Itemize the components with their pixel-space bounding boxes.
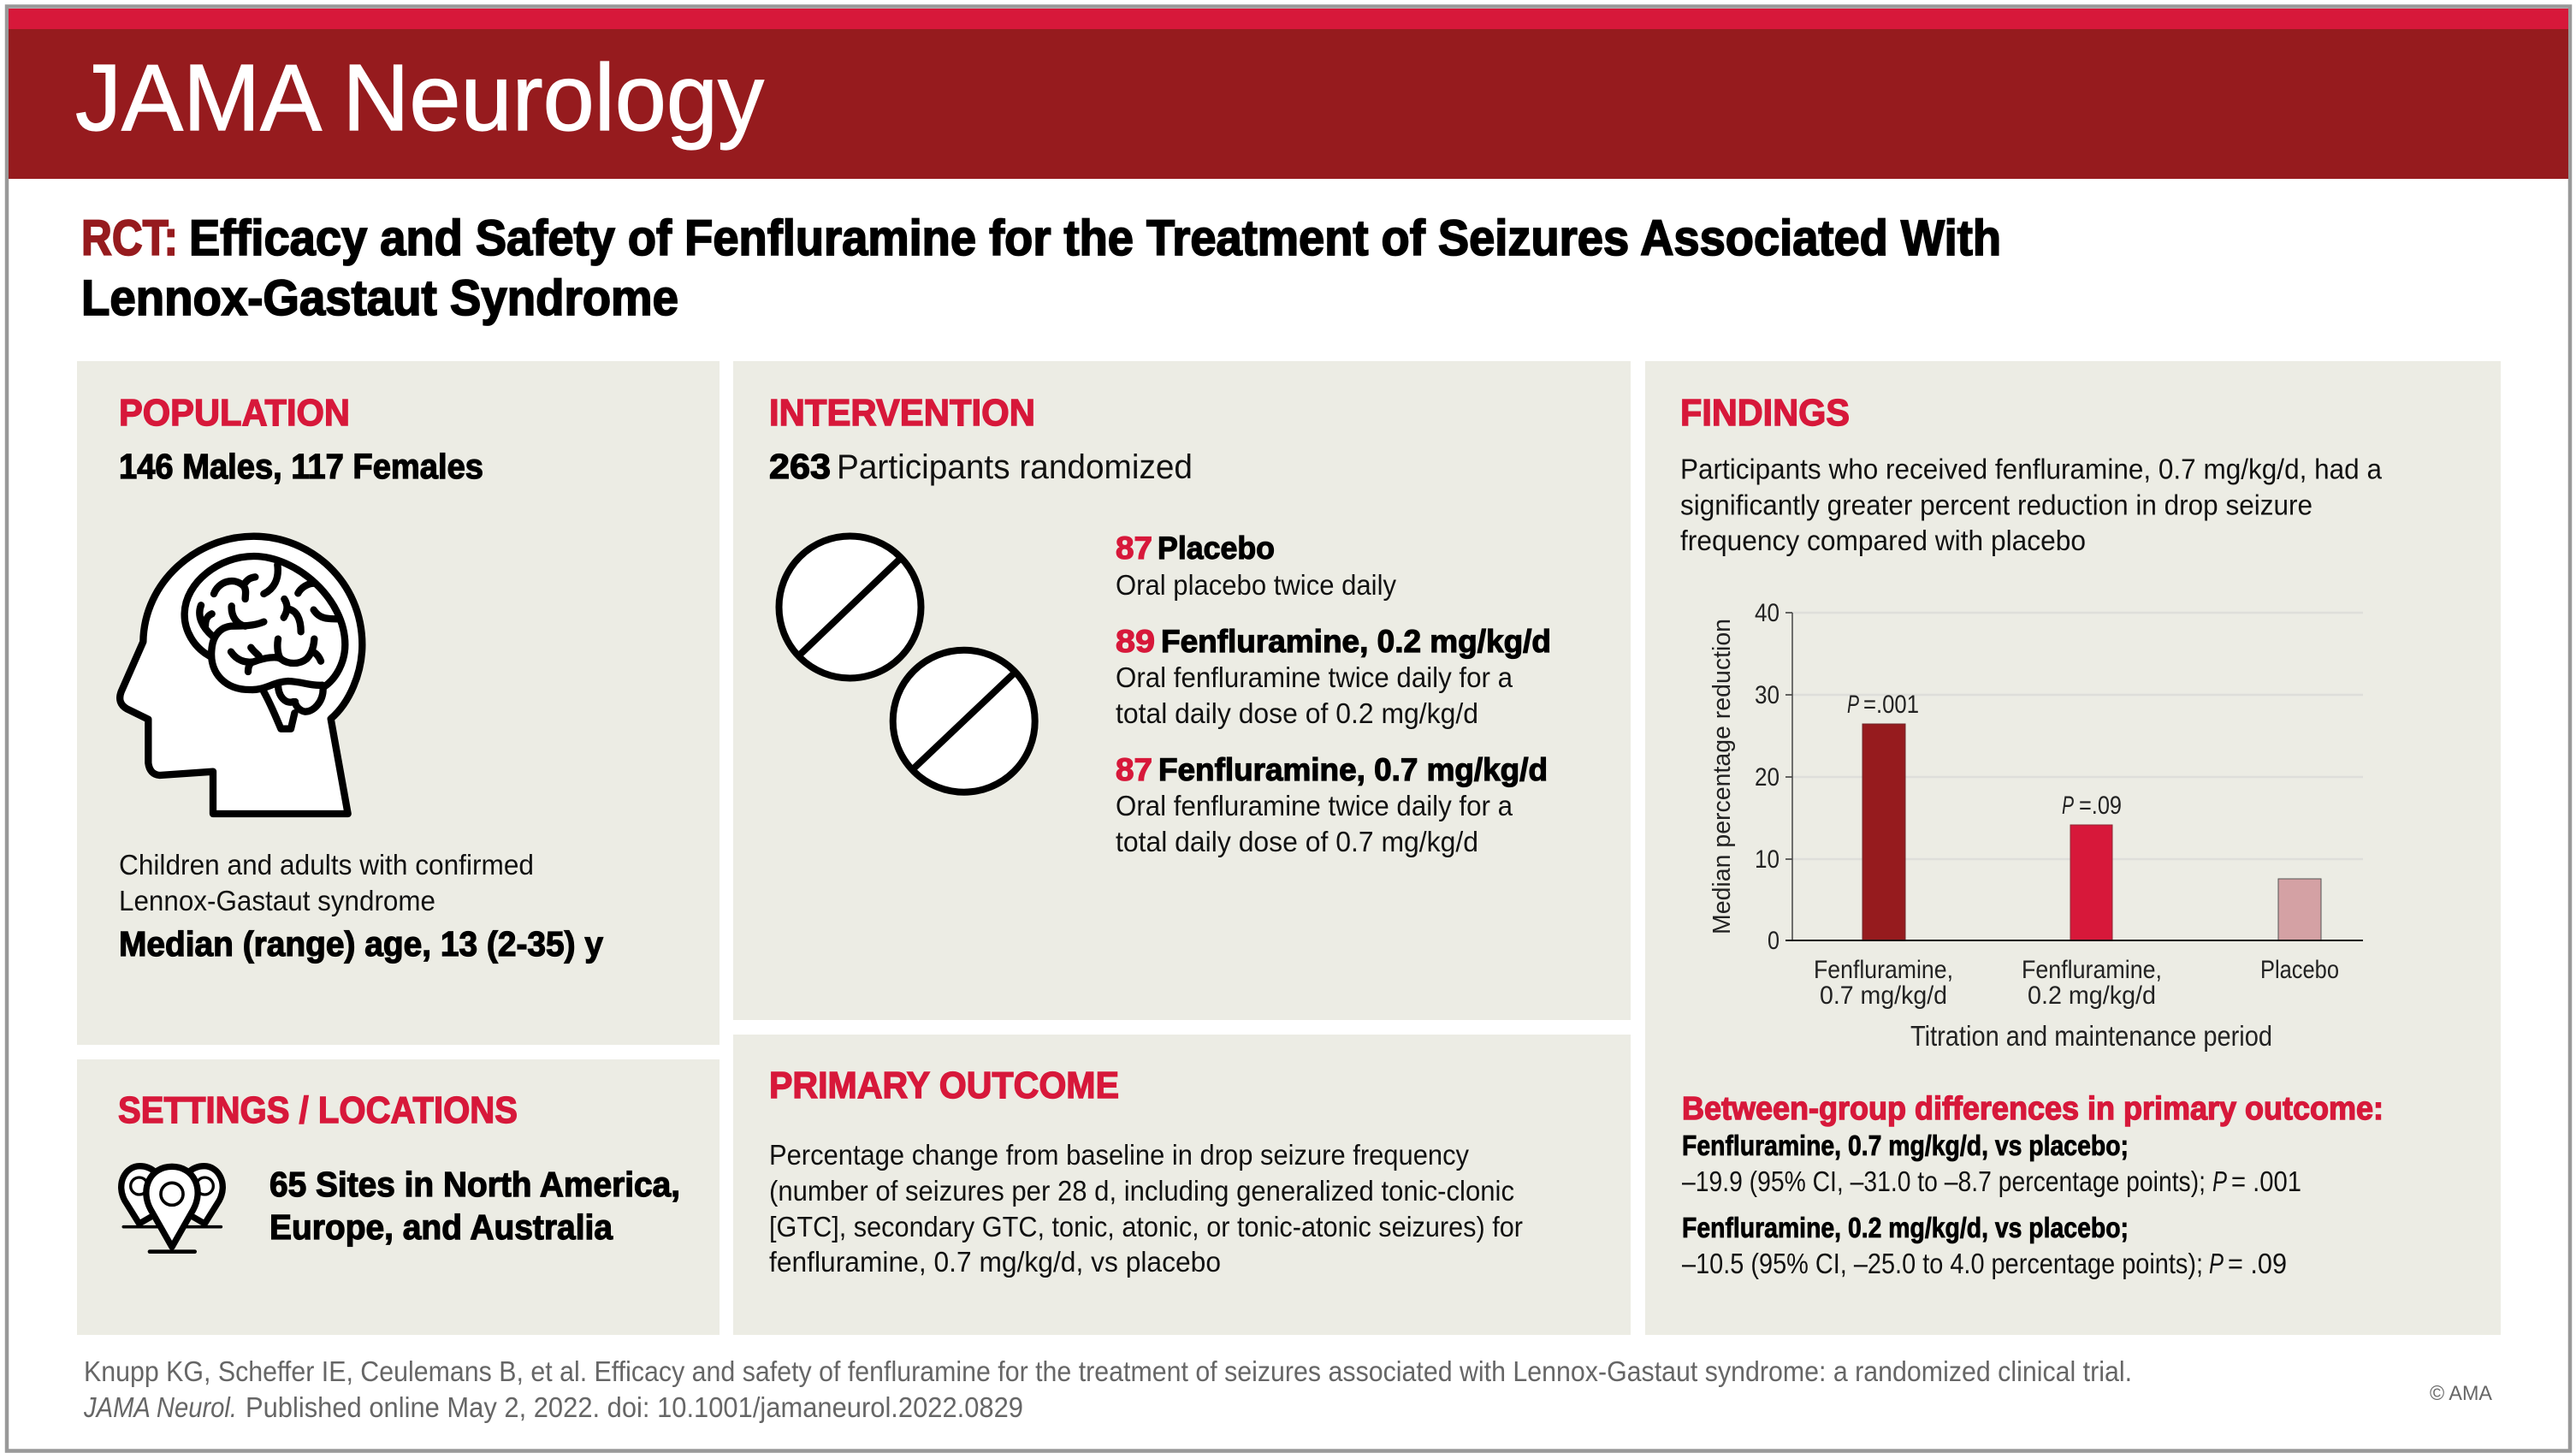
x-axis label: placebo: Placebo	[2260, 956, 2339, 984]
x-axis label: fenfluramine 0.7	[1814, 956, 1953, 1010]
x-axis label: fenfluramine 0.7: 0.7 mg/kg/d	[1820, 982, 1947, 1010]
heading: primary outcome: PRIMARY OUTCOME	[769, 1065, 1119, 1106]
primary outcome description: [GTC], secondary GTC, tonic, atonic, or tonic-atonic seizures) for	[769, 1212, 1523, 1243]
panel: findings	[1645, 361, 2501, 1335]
arm: placebo: 87	[1116, 531, 1152, 566]
x-axis label: fenfluramine 0.2: Fenfluramine,	[2022, 956, 2162, 984]
x-axis label: fenfluramine 0.2	[2022, 956, 2162, 1010]
result: fenfluramine 0.7 vs placebo: P	[2212, 1166, 2227, 1198]
y-axis tick labels: 0	[1768, 927, 1780, 955]
result: fenfluramine 0.7 vs placebo: –19.9 (95% CI, –31.0 to –8.7 percentage points);	[1682, 1166, 2206, 1198]
panel: settings and locations	[77, 1059, 720, 1335]
panel: primary outcome	[733, 1035, 1631, 1335]
p value: 0.7: P	[1847, 691, 1859, 719]
arm: fenfluramine 0.2	[1116, 624, 1551, 730]
participants randomized: 263	[769, 447, 831, 486]
result: fenfluramine 0.7 vs placebo: Fenfluramine, 0.7 mg/kg/d, vs placebo;	[1682, 1130, 2129, 1161]
article title	[81, 211, 2001, 326]
heading: findings: FINDINGS	[1680, 392, 1850, 434]
arm: fenfluramine 0.2: total daily dose of 0.2 mg/kg/d	[1116, 698, 1478, 730]
sites text: 65 Sites in North America,	[269, 1165, 680, 1204]
result: fenfluramine 0.2 vs placebo: P	[2209, 1248, 2224, 1280]
primary outcome description: fenfluramine, 0.7 mg/kg/d, vs placebo	[769, 1247, 1221, 1278]
population description: Lennox-Gastaut syndrome	[119, 886, 435, 917]
result: fenfluramine 0.7 vs placebo	[1682, 1130, 2301, 1198]
arm: placebo: Placebo	[1158, 531, 1275, 566]
p value: 0.7	[1847, 691, 1919, 719]
p value: 0.7: =.001	[1863, 691, 1919, 719]
arm: fenfluramine 0.7: Fenfluramine, 0.7 mg/kg/d	[1158, 752, 1548, 787]
primary outcome description	[769, 1140, 1523, 1278]
bar: placebo	[2278, 879, 2321, 940]
findings summary: Participants who received fenfluramine, 0.7 mg/kg/d, had a	[1680, 454, 2382, 486]
heading: population: POPULATION	[119, 392, 350, 434]
sites text: Europe, and Australia	[269, 1207, 613, 1247]
panel: intervention	[733, 361, 1631, 1020]
p value: 0.2	[2062, 792, 2122, 820]
primary outcome description: Percentage change from baseline in drop seizure frequency	[769, 1140, 1469, 1171]
y-axis tick labels: 10	[1755, 845, 1780, 874]
arm: fenfluramine 0.2: 89	[1116, 624, 1155, 659]
y-axis tick labels	[1755, 599, 1780, 955]
article title: RCT:	[81, 211, 178, 266]
arm: fenfluramine 0.7	[1116, 752, 1548, 858]
citation	[83, 1356, 2132, 1424]
result: fenfluramine 0.2 vs placebo	[1682, 1212, 2287, 1280]
population counts: 146 Males, 117 Females	[119, 447, 483, 486]
article title: Lennox-Gastaut Syndrome	[81, 270, 678, 326]
x-axis title: Titration and maintenance period	[1910, 1020, 2272, 1052]
arm: placebo	[1116, 531, 1396, 602]
journal title: JAMA Neurology	[75, 45, 764, 151]
population description: Children and adults with confirmed	[119, 850, 534, 881]
icon: pills	[779, 536, 1035, 792]
result: fenfluramine 0.7 vs placebo: = .001	[2231, 1166, 2301, 1198]
median age: Median (range) age, 13 (2-35) y	[119, 924, 603, 964]
heading: intervention: INTERVENTION	[769, 392, 1035, 434]
header band	[9, 9, 2568, 179]
copyright: © AMA	[2430, 1382, 2492, 1405]
heading: settings: SETTINGS / LOCATIONS	[118, 1089, 518, 1131]
panel: population	[77, 361, 720, 1045]
arm: fenfluramine 0.2: Oral fenfluramine twice daily for a	[1116, 662, 1513, 694]
citation: JAMA Neurol.	[83, 1392, 237, 1424]
sites text	[269, 1165, 680, 1247]
arm: fenfluramine 0.7: total daily dose of 0.7 mg/kg/d	[1116, 827, 1478, 858]
result: fenfluramine 0.2 vs placebo: Fenfluramine, 0.2 mg/kg/d, vs placebo;	[1682, 1212, 2129, 1243]
result: fenfluramine 0.2 vs placebo: = .09	[2228, 1248, 2287, 1280]
citation: Knupp KG, Scheffer IE, Ceulemans B, et al. Efficacy and safety of fenfluramine for the treatment of seizures associated with Lennox-Gastaut syndrome: a randomized clinical trial.	[84, 1356, 2132, 1388]
x-axis label: fenfluramine 0.7: Fenfluramine,	[1814, 956, 1953, 984]
findings summary	[1680, 454, 2382, 557]
icon: location pins	[121, 1166, 222, 1252]
x-axis label: fenfluramine 0.2: 0.2 mg/kg/d	[2028, 982, 2156, 1010]
primary outcome description: (number of seizures per 28 d, including generalized tonic-clonic	[769, 1176, 1514, 1207]
article title: Efficacy and Safety of Fenfluramine for the Treatment of Seizures Associated With	[189, 211, 2001, 266]
bar: fenfluramine 0.2	[2070, 825, 2112, 940]
arm: placebo: Oral placebo twice daily	[1116, 570, 1396, 602]
y-axis tick labels: 20	[1755, 763, 1780, 792]
arm: fenfluramine 0.7: Oral fenfluramine twice daily for a	[1116, 791, 1513, 822]
bar chart	[1708, 599, 2363, 1052]
arm: fenfluramine 0.2: Fenfluramine, 0.2 mg/kg/d	[1161, 624, 1551, 659]
arm: fenfluramine 0.7: 87	[1116, 752, 1152, 787]
findings summary: frequency compared with placebo	[1680, 525, 2086, 557]
result: fenfluramine 0.2 vs placebo: –10.5 (95% CI, –25.0 to 4.0 percentage points);	[1682, 1248, 2203, 1280]
participants randomized: Participants randomized	[837, 448, 1193, 486]
y-axis tick labels: 40	[1755, 599, 1780, 627]
y-axis title: Median percentage reduction	[1708, 619, 1736, 934]
p value: 0.2: =.09	[2079, 792, 2122, 820]
bar: fenfluramine 0.7	[1862, 724, 1905, 940]
heading: between-group differences: Between-group differences in primary outcome:	[1682, 1091, 2384, 1127]
y-axis tick labels: 30	[1755, 681, 1780, 709]
population description	[119, 850, 534, 917]
icon: head with brain	[120, 537, 362, 814]
citation: Published online May 2, 2022. doi: 10.1001/jamaneurol.2022.0829	[246, 1392, 1023, 1424]
p value: 0.2: P	[2062, 792, 2074, 820]
findings summary: significantly greater percent reduction in drop seizure	[1680, 489, 2312, 522]
